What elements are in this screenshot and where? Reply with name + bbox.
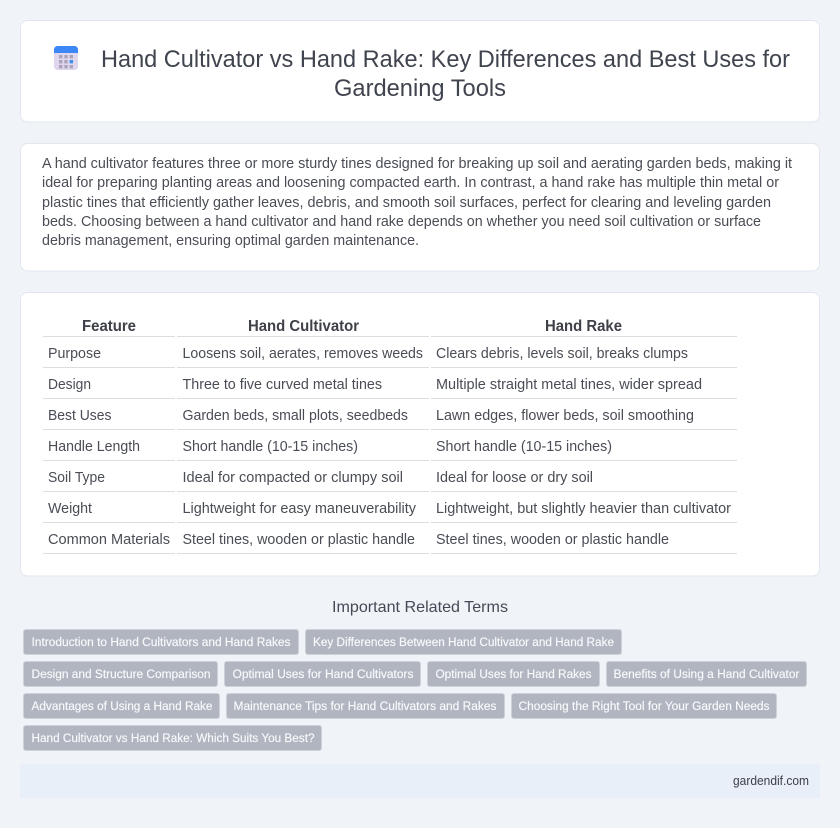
table row: design: Design [48,377,91,393]
table row: design: Three to five curved metal tines [182,377,382,393]
table row: weight: Weight [48,501,92,517]
footer bar: gardendif.com [733,774,809,788]
tag [24,694,220,718]
tag [606,662,806,686]
table row: common materials: Steel tines, wooden or plastic handle [182,532,415,548]
text block: introduction paragraph: ideal for preparing planting areas and loosening compacted earth. In contrast, a hand rake has multiple thin metal or [42,175,779,191]
icon: calendar [54,46,78,70]
tag [512,694,776,718]
table row: handle length [43,439,737,461]
panel: header card [20,20,820,122]
panel: comparison table card [20,292,820,576]
tag: Maintenance Tips for Hand Cultivators and Rakes [234,699,496,713]
tag [428,662,600,686]
tag: Advantages of Using a Hand Rake [32,699,213,713]
text block: introduction paragraph: beds. Choosing between a hand cultivator and hand rake depends on whether you need soil cultivation or surface [42,214,761,230]
tag: Benefits of Using a Hand Cultivator [614,667,800,681]
table row: purpose: Purpose [48,346,101,362]
tag: Introduction to Hand Cultivators and Hand Rakes [32,635,290,649]
table header row: Hand Rake [545,318,622,335]
table row: weight [43,501,737,523]
table row: soil type [43,470,737,492]
tag [306,630,622,654]
table row: design: Multiple straight metal tines, wider spread [436,377,702,393]
title: Hand Cultivator vs Hand Rake: Key Differences and Best Uses for [101,46,790,73]
heading: important related terms: Important Related Terms [332,599,508,616]
table row: handle length: Short handle (10-15 inches) [182,439,358,455]
table row: common materials [43,532,737,554]
text block: introduction paragraph: debris management, ensuring optimal garden maintenance. [42,233,419,249]
table row: design [43,377,737,399]
related term tags [24,630,806,750]
text block: introduction paragraph [42,156,792,249]
table row: purpose: Clears debris, levels soil, breaks clumps [436,346,688,362]
tag: Key Differences Between Hand Cultivator and Hand Rake [313,635,614,649]
title [101,46,790,102]
text block: introduction paragraph: plastic tines that efficiently gather leaves, debris, and smooth soil surfaces, perfect for clearing and leveling garden [42,195,771,211]
table row: common materials: Steel tines, wooden or plastic handle [436,532,669,548]
tag: Optimal Uses for Hand Rakes [436,667,592,681]
table row: handle length: Short handle (10-15 inches) [436,439,612,455]
table row: soil type: Ideal for compacted or clumpy soil [182,470,403,486]
table row: weight: Lightweight for easy maneuverability [182,501,417,517]
table row: weight: Lightweight, but slightly heavier than cultivator [436,501,731,517]
title: Gardening Tools [334,75,506,102]
tag [24,662,218,686]
tag: Hand Cultivator vs Hand Rake: Which Suits You Best? [32,731,315,745]
table header row: Hand Cultivator [248,318,359,335]
tag [226,694,504,718]
tag [24,630,298,654]
panel: introduction text card [20,144,820,271]
tag [224,662,420,686]
tag: Design and Structure Comparison [32,667,211,681]
table row: best uses [43,408,737,430]
table header row: Feature [82,318,136,335]
footer bar [20,764,820,798]
table row: soil type: Ideal for loose or dry soil [436,470,593,486]
tag: Choosing the Right Tool for Your Garden Needs [518,699,770,713]
text block: introduction paragraph: A hand cultivator features three or more sturdy tines designed for breaking up soil and aerating garden beds, making it [42,156,792,172]
tag: Optimal Uses for Hand Cultivators [232,667,414,681]
table header row [43,318,737,337]
table row: purpose: Loosens soil, aerates, removes weeds [182,346,423,362]
table row: common materials: Common Materials [48,532,170,548]
table row: best uses: Best Uses [48,408,112,424]
table row: best uses: Lawn edges, flower beds, soil smoothing [436,408,694,424]
table row: best uses: Garden beds, small plots, seedbeds [182,408,408,424]
table row: soil type: Soil Type [48,470,105,486]
table row: handle length: Handle Length [48,439,140,455]
tag [24,726,322,750]
table row: purpose [43,346,737,368]
